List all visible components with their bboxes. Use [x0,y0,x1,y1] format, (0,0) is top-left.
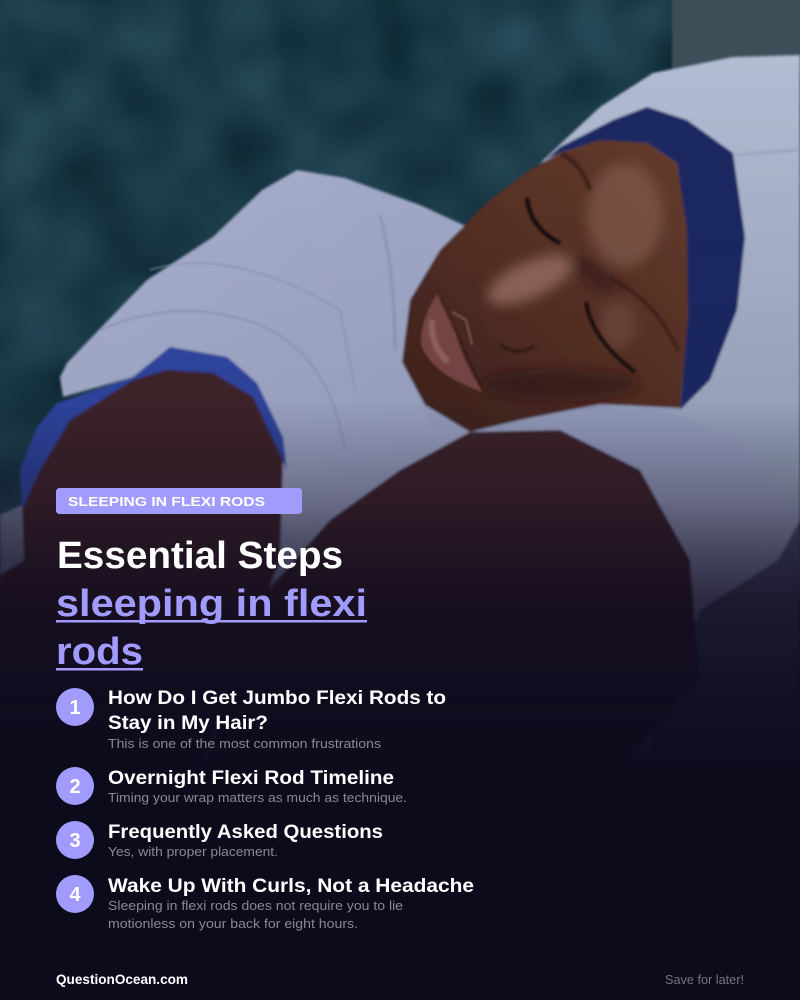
left sleeve [60,170,470,560]
number badge 2: 2 [69,776,81,798]
number badge 2 [56,767,94,805]
step 4 description: motionless on your back for eight hours. [108,916,358,931]
number badge 4 [56,875,94,913]
step 2 [56,767,407,805]
step 2 heading: Overnight Flexi Rod Timeline [108,767,394,789]
title accent line 2: rods [56,631,143,673]
badge: SLEEPING IN FLEXI RODS [68,494,265,509]
number badge 3 [56,821,94,859]
lower eyelashes [586,302,635,372]
left cuff [20,347,287,510]
face [402,140,688,432]
navy inner band [545,107,745,410]
left arm [0,370,283,770]
step 4 description: Sleeping in flexi rods does not require you to lie [108,898,403,913]
step 4 description [108,898,403,931]
upper eyelashes [527,198,560,243]
step 3 description: Yes, with proper placement. [108,844,278,859]
step 2 description: Timing your wrap matters as much as technique. [108,790,407,805]
hijab [540,55,800,520]
step 4 [56,875,474,931]
philtrum highlight [452,312,472,345]
number badge 1: 1 [69,697,81,719]
step 3 [56,821,383,859]
eyebrows [562,154,590,190]
step 1 [56,687,446,751]
footer call to action: Save for later! [665,973,744,987]
large foreground arm [200,430,700,790]
sleeve folds [100,311,345,450]
step 1 description: This is one of the most common frustrations [108,736,382,751]
step 1 heading continued: Stay in My Hair? [108,712,268,734]
title accent line 1: sleeping in flexi [56,583,367,625]
white cloth lower left [0,505,24,575]
number badge 1 [56,688,94,726]
background photo: woman sleeping in white hijab [0,0,800,790]
title [56,535,367,673]
shadow right of lower sleeve [640,520,800,770]
badge [56,488,302,514]
footer brand: QuestionOcean.com [56,971,188,987]
lips [421,294,483,392]
number badge 4: 4 [69,884,81,906]
step 4 heading: Wake Up With Curls, Not a Headache [108,875,474,897]
nostril [500,344,534,352]
step 1 heading: How Do I Get Jumbo Flexi Rods to [108,687,446,709]
facial details [480,163,663,401]
lower body backing cloth [0,300,800,770]
number badge 3: 3 [69,830,81,852]
title: Essential Steps [57,535,343,577]
blurred teal foliage background [0,0,800,600]
light wall top right [672,0,800,75]
step 3 heading: Frequently Asked Questions [108,821,383,843]
